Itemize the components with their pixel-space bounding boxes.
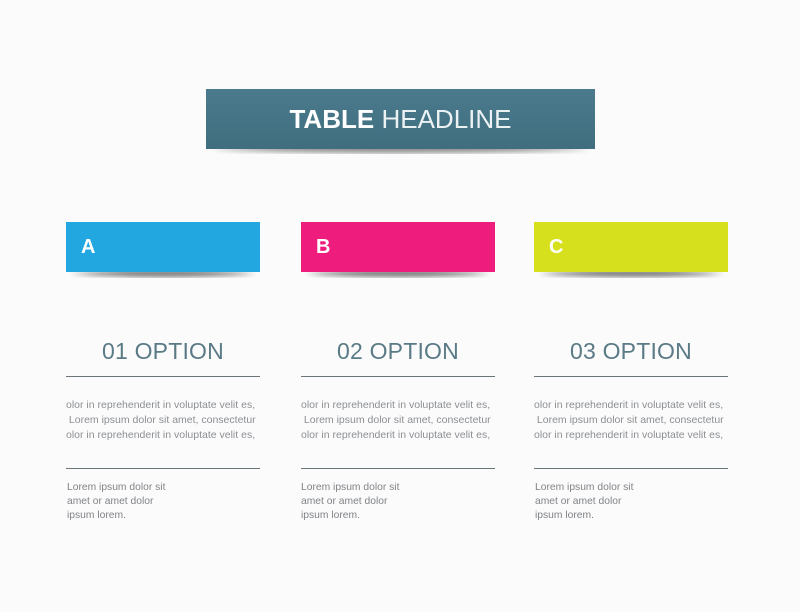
- text C: [534, 399, 724, 441]
- text C: olor in reprehenderit in voluptate velit es,: [534, 399, 723, 411]
- note A: [67, 482, 166, 521]
- note B: [301, 482, 400, 521]
- text A: olor in reprehenderit in voluptate velit es,: [66, 399, 255, 411]
- tab C: C: [549, 236, 563, 258]
- title banner: [206, 89, 595, 154]
- option A heading: 01 OPTION: [102, 338, 224, 364]
- note B: ipsum lorem.: [301, 510, 360, 521]
- note A: ipsum lorem.: [67, 510, 126, 521]
- text B: [301, 399, 491, 441]
- text B: Lorem ipsum dolor sit amet, consectetur: [304, 414, 491, 426]
- text C: Lorem ipsum dolor sit amet, consectetur: [537, 414, 724, 426]
- column A: [66, 222, 260, 278]
- tab C: [534, 222, 728, 272]
- tab B: [301, 222, 495, 272]
- note C: Lorem ipsum dolor sit: [535, 482, 633, 493]
- text A: [66, 399, 256, 441]
- tab B: B: [316, 236, 330, 258]
- column C: [534, 222, 728, 278]
- column B: [301, 222, 495, 278]
- text B: olor in reprehenderit in voluptate velit es,: [301, 429, 490, 441]
- option C heading: 03 OPTION: [570, 338, 692, 364]
- text A: olor in reprehenderit in voluptate velit es,: [66, 429, 255, 441]
- tab A: [66, 222, 260, 272]
- tab A: A: [81, 236, 95, 258]
- option B heading: 02 OPTION: [337, 338, 459, 364]
- note B: amet or amet dolor: [301, 496, 387, 507]
- text A: Lorem ipsum dolor sit amet, consectetur: [69, 414, 256, 426]
- note C: ipsum lorem.: [535, 510, 594, 521]
- note B: Lorem ipsum dolor sit: [301, 482, 399, 493]
- note C: [535, 482, 634, 521]
- note A: Lorem ipsum dolor sit: [67, 482, 165, 493]
- note A: amet or amet dolor: [67, 496, 153, 507]
- title banner: TABLE HEADLINE: [289, 104, 512, 134]
- note C: amet or amet dolor: [535, 496, 621, 507]
- text B: olor in reprehenderit in voluptate velit es,: [301, 399, 490, 411]
- text C: olor in reprehenderit in voluptate velit es,: [534, 429, 723, 441]
